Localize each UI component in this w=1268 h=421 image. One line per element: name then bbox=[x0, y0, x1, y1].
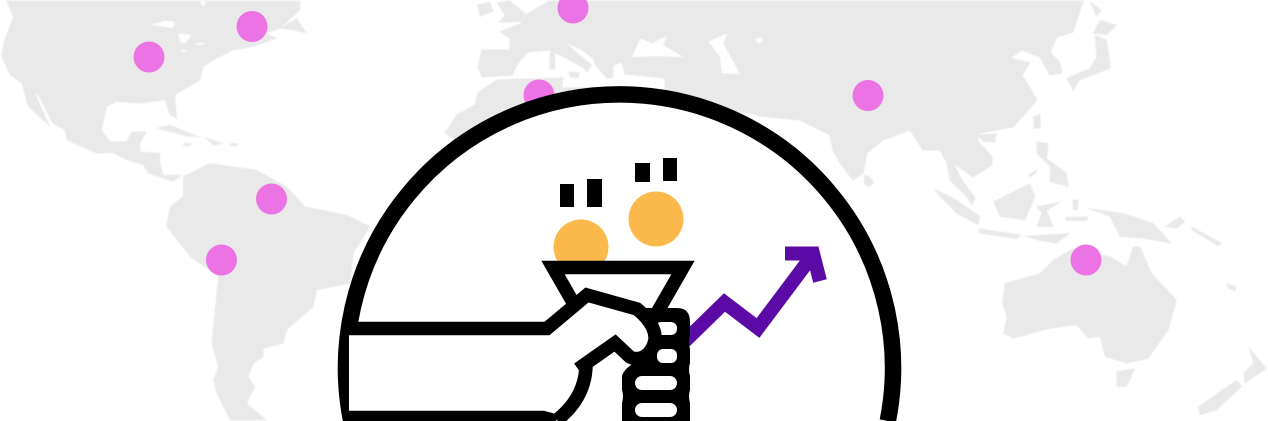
marker: northern Europe bbox=[558, 0, 588, 23]
finger 1 bbox=[655, 322, 677, 335]
location markers bbox=[134, 0, 1102, 276]
arm and thumb fill bbox=[349, 295, 655, 421]
fingers bbox=[622, 308, 690, 421]
coin: upper bbox=[628, 192, 684, 246]
wrist curve bbox=[557, 366, 586, 420]
map: Europe islands and inland seas bbox=[477, 1, 762, 78]
map: North America bbox=[2, 1, 307, 182]
circular badge outline bbox=[346, 94, 893, 421]
arm, hand and thumb outline bbox=[349, 295, 655, 369]
coin: lower bbox=[554, 220, 608, 274]
circular badge bbox=[346, 94, 893, 421]
marker: central North America bbox=[134, 42, 164, 72]
marker: north Africa bbox=[524, 80, 554, 110]
finger outline silhouette bbox=[622, 308, 690, 421]
icon: cocktail glass bbox=[553, 268, 683, 325]
map: Asia-Pacific islands, Australia and New Zealand bbox=[864, 2, 1267, 415]
finger 3 bbox=[635, 376, 677, 390]
arrow: purple growth line bbox=[684, 254, 820, 342]
icon: hand and arm holding glass bbox=[349, 295, 690, 421]
marker: northern Australia bbox=[1070, 244, 1102, 276]
icon: bubble bars bbox=[560, 158, 677, 207]
map: Eurasia bbox=[478, 1, 1083, 205]
icon: rising coins bbox=[554, 192, 684, 274]
finger 4 bbox=[635, 403, 677, 417]
arm lower outline bbox=[349, 418, 556, 421]
marker: eastern North America bbox=[236, 11, 268, 42]
map: Africa bbox=[445, 78, 620, 250]
marker: Asia bbox=[852, 80, 884, 111]
finger 2 bbox=[657, 349, 677, 363]
marker: northern South America bbox=[256, 184, 287, 214]
marker: western South America bbox=[206, 244, 237, 276]
map: South America bbox=[167, 163, 370, 420]
